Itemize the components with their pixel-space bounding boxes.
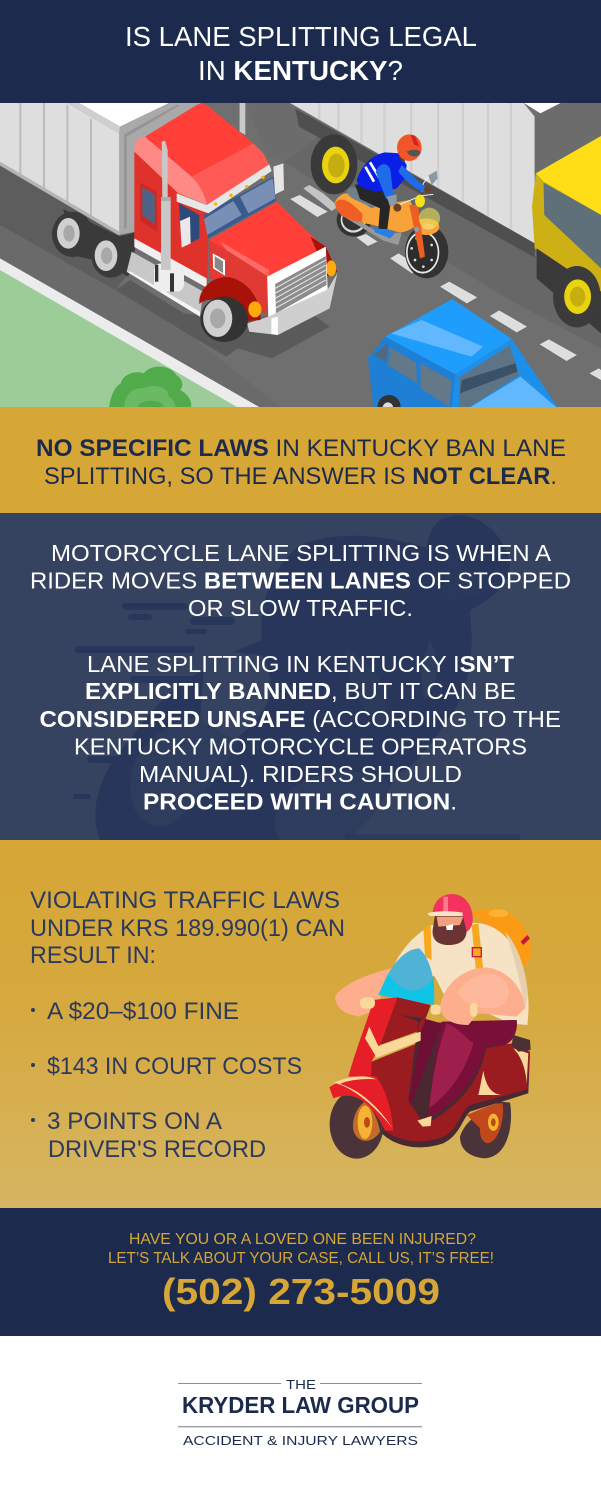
motorcycle and rider [303,134,448,278]
rider right arm and hands [360,967,525,1025]
red semi truck cab [127,104,284,317]
grass verge [0,258,264,410]
panel: lane splitting definition [0,513,601,840]
exhaust smoke [303,185,338,211]
heading: is lane splitting legal in Kentucky [125,21,477,86]
definition text [30,540,571,621]
definition text: RIDER MOVES BETWEEN LANES OF STOPPED [30,568,571,594]
truck hood and grille [199,202,337,342]
fuel step and tanks [127,252,203,317]
rider helmet [397,134,422,161]
logo: The Kryder Law Group: ACCIDENT & INJURY LAWYERS [183,1433,418,1448]
rider leg [355,184,391,229]
scooter body [370,1035,531,1147]
definition text: MOTORCYCLE LANE SPLITTING IS WHEN A [51,540,551,566]
logo: The Kryder Law Group [0,1336,601,1497]
callout text: SPLITTING, SO THE ANSWER IS NOT CLEAR. [44,463,557,490]
call to action text: HAVE YOU OR A LOVED ONE BEEN INJURED? [129,1231,476,1248]
heading: is lane splitting legal in Kentucky: IS LANE SPLITTING LEGAL [125,21,477,52]
blue car [368,299,560,418]
panel: title header [0,0,601,102]
rear wheel [460,1102,511,1158]
illustration: traffic scene with truck, motorcycle and car [0,103,601,407]
penalties intro text [30,887,345,969]
rear wheel [337,203,371,237]
head and helmet [427,894,473,945]
rider torso [357,152,407,191]
legal status text: EXPLICITLY BANNED , BUT IT CAN BE [85,678,516,704]
rider left arm [335,967,395,1017]
cab side [134,152,208,285]
tank and tail [334,193,419,232]
cab roof [134,137,207,205]
handlebars [398,176,433,205]
exhaust pipe [340,212,402,245]
penalties list: DRIVER'S RECORD [48,1136,266,1163]
phone number: (502) 273-5009 [162,1271,440,1312]
logo: The Kryder Law Group: KRYDER LAW GROUP [182,1392,419,1418]
legal status text: KENTUCKY MOTORCYCLE OPERATORS [74,734,527,760]
left trailer [0,103,202,236]
legal status text: LANE SPLITTING IN KENTUCKY I SN’T [87,651,515,677]
illustration: bearded man on scooter [329,894,531,1159]
callout text: NO SPECIFIC LAWS IN KENTUCKY BAN LANE [36,435,566,462]
penalties list: A $20–$100 FINE [47,998,239,1025]
watermark: motorcycle rider [73,516,520,840]
panel: call to action [0,1208,601,1336]
penalties intro text: UNDER KRS 189.990(1) CAN [30,915,345,942]
scooter front shield [348,997,431,1077]
heading: is lane splitting legal in Kentucky: IN KENTUCKY? [198,55,403,86]
definition text: OR SLOW TRAFFIC. [188,595,413,621]
rider torso and straps [395,923,528,1025]
legal status text: PROCEED WITH CAUTION . [143,788,457,814]
panel: penalties [0,840,601,1208]
penalties list: $143 IN COURT COSTS [47,1053,302,1080]
penalties intro text: RESULT IN: [30,942,156,969]
legal status text [40,651,561,814]
front wheel and fender [329,1076,393,1159]
penalties list [31,998,302,1163]
penalties intro text: VIOLATING TRAFFIC LAWS [30,887,340,914]
lane markings [290,195,601,380]
rear truck wheels [52,209,135,278]
yellow truck [532,136,601,333]
legal status text: MANUAL). RIDERS SHOULD [139,761,462,787]
right trailer [289,103,601,257]
legal status text: CONSIDERED UNSAFE (ACCORDING TO THE [40,706,561,732]
callout text [36,435,566,490]
backpack [472,909,531,968]
windshield [378,948,434,1005]
rider leg [408,1018,517,1127]
icon: bush [108,367,191,410]
call to action text [108,1231,494,1267]
logo: The Kryder Law Group: THE [286,1377,316,1392]
trailer wheel [311,134,357,194]
front wheel [405,225,448,278]
exhaust stack [161,141,171,270]
call to action text: LET’S TALK ABOUT YOUR CASE, CALL US, IT’S FREE! [108,1250,494,1267]
windshield [204,177,276,238]
panel: no specific laws callout [0,407,601,513]
penalties list: 3 POINTS ON A [47,1108,222,1135]
